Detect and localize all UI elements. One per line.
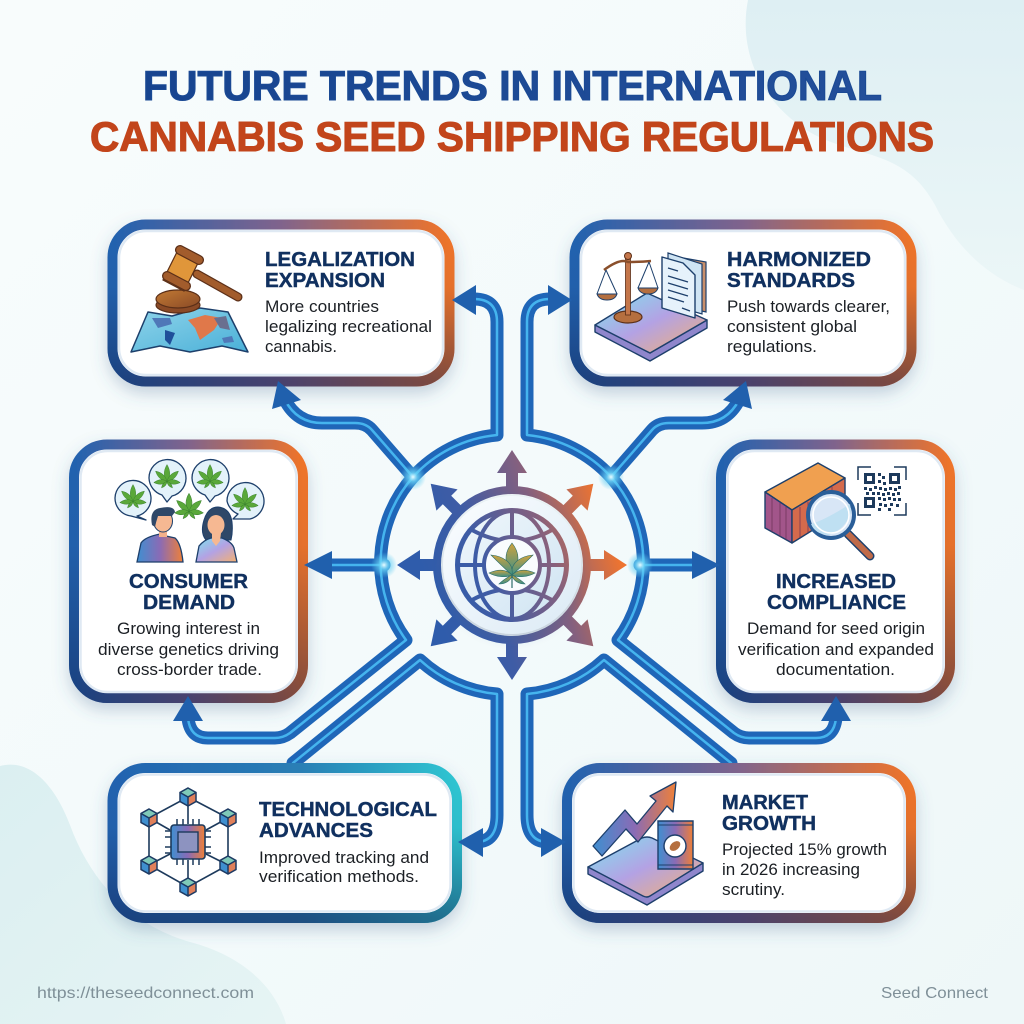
heading: COMPLIANCE bbox=[767, 592, 906, 614]
heading bbox=[722, 792, 816, 835]
panel: legalization expansion bbox=[112, 224, 450, 382]
heading: GROWTH bbox=[722, 813, 816, 835]
heading bbox=[265, 249, 415, 292]
panel: technological advances bbox=[112, 768, 457, 918]
heading: LEGALIZATION bbox=[265, 249, 415, 271]
text block bbox=[722, 840, 887, 899]
heading: TECHNOLOGICAL bbox=[259, 799, 437, 821]
text block: Projected 15% growth bbox=[722, 840, 887, 859]
icon: gavel over world map bbox=[131, 250, 248, 352]
text block: Push towards clearer, bbox=[727, 297, 890, 316]
heading: INCREASED bbox=[776, 571, 896, 593]
icon: rising arrow, seed bag and platform bbox=[588, 782, 703, 905]
central hub: globe with cannabis leaf and radiating arrows bbox=[397, 450, 627, 680]
connector pipes from hub to panels bbox=[188, 299, 836, 842]
text block bbox=[265, 297, 432, 356]
text block: legalizing recreational bbox=[265, 317, 432, 336]
heading bbox=[727, 249, 871, 292]
text block: Improved tracking and bbox=[259, 848, 429, 867]
heading: MARKET bbox=[722, 792, 808, 814]
text block: More countries bbox=[265, 297, 379, 316]
text block: cannabis. bbox=[265, 337, 337, 356]
icon: scales and documents on platform bbox=[595, 252, 707, 361]
text block: documentation. bbox=[776, 660, 895, 679]
title: CANNABIS SEED SHIPPING REGULATIONS bbox=[90, 113, 934, 160]
heading: HARMONIZED bbox=[727, 249, 871, 271]
icon: two people with cannabis leaf speech bubbles bbox=[115, 460, 264, 562]
panel: market growth bbox=[567, 768, 911, 918]
arrow: up to consumer demand bbox=[173, 696, 203, 721]
heading: STANDARDS bbox=[727, 270, 855, 292]
text block: cross-border trade. bbox=[117, 660, 262, 679]
arrow: to increased compliance bbox=[692, 551, 720, 579]
globe bbox=[458, 510, 566, 620]
footer: website link: https://theseedconnect.com bbox=[37, 985, 254, 1002]
heading bbox=[767, 571, 906, 614]
text block: verification methods. bbox=[259, 867, 419, 886]
text block: scrutiny. bbox=[722, 880, 785, 899]
text block: diverse genetics driving bbox=[98, 640, 279, 659]
text block: Demand for seed origin bbox=[747, 619, 925, 638]
hub ring and eight directional arrows bbox=[397, 450, 627, 680]
heading: ADVANCES bbox=[259, 820, 373, 842]
title: FUTURE TRENDS IN INTERNATIONAL bbox=[143, 62, 882, 109]
arrow: to technological advances bbox=[458, 828, 483, 857]
text block: in 2026 increasing bbox=[722, 860, 860, 879]
icon: shipping container with magnifier and QR code bbox=[765, 463, 906, 556]
text block: Growing interest in bbox=[117, 619, 260, 638]
title bbox=[90, 62, 934, 160]
arrow: to consumer demand bbox=[304, 551, 332, 579]
heading bbox=[129, 571, 249, 614]
text block bbox=[727, 297, 890, 356]
footer: brand name: Seed Connect bbox=[881, 985, 989, 1002]
arrow: to harmonized standards bbox=[548, 285, 572, 315]
icon: cannabis leaf bbox=[489, 543, 535, 588]
heading: EXPANSION bbox=[265, 270, 385, 292]
text block bbox=[738, 619, 934, 679]
heading: CONSUMER bbox=[129, 571, 249, 593]
text block: consistent global bbox=[727, 317, 857, 336]
panel: consumer demand bbox=[74, 444, 303, 698]
arrow: to market growth bbox=[541, 828, 566, 857]
panel: harmonized standards bbox=[574, 224, 912, 382]
arrow: to legalization expansion bbox=[452, 285, 476, 315]
text block: regulations. bbox=[727, 337, 817, 356]
text block bbox=[98, 619, 279, 679]
arrow: up to increased compliance bbox=[821, 696, 851, 721]
text block bbox=[259, 848, 429, 886]
heading: DEMAND bbox=[143, 592, 235, 614]
text block: verification and expanded bbox=[738, 640, 934, 659]
arrow: up to legalization expansion bbox=[272, 381, 301, 409]
arrow: up to harmonized standards bbox=[723, 381, 752, 409]
heading bbox=[259, 799, 437, 842]
panel: increased compliance bbox=[721, 444, 950, 698]
icon: chip and connected cube network bbox=[141, 788, 236, 896]
